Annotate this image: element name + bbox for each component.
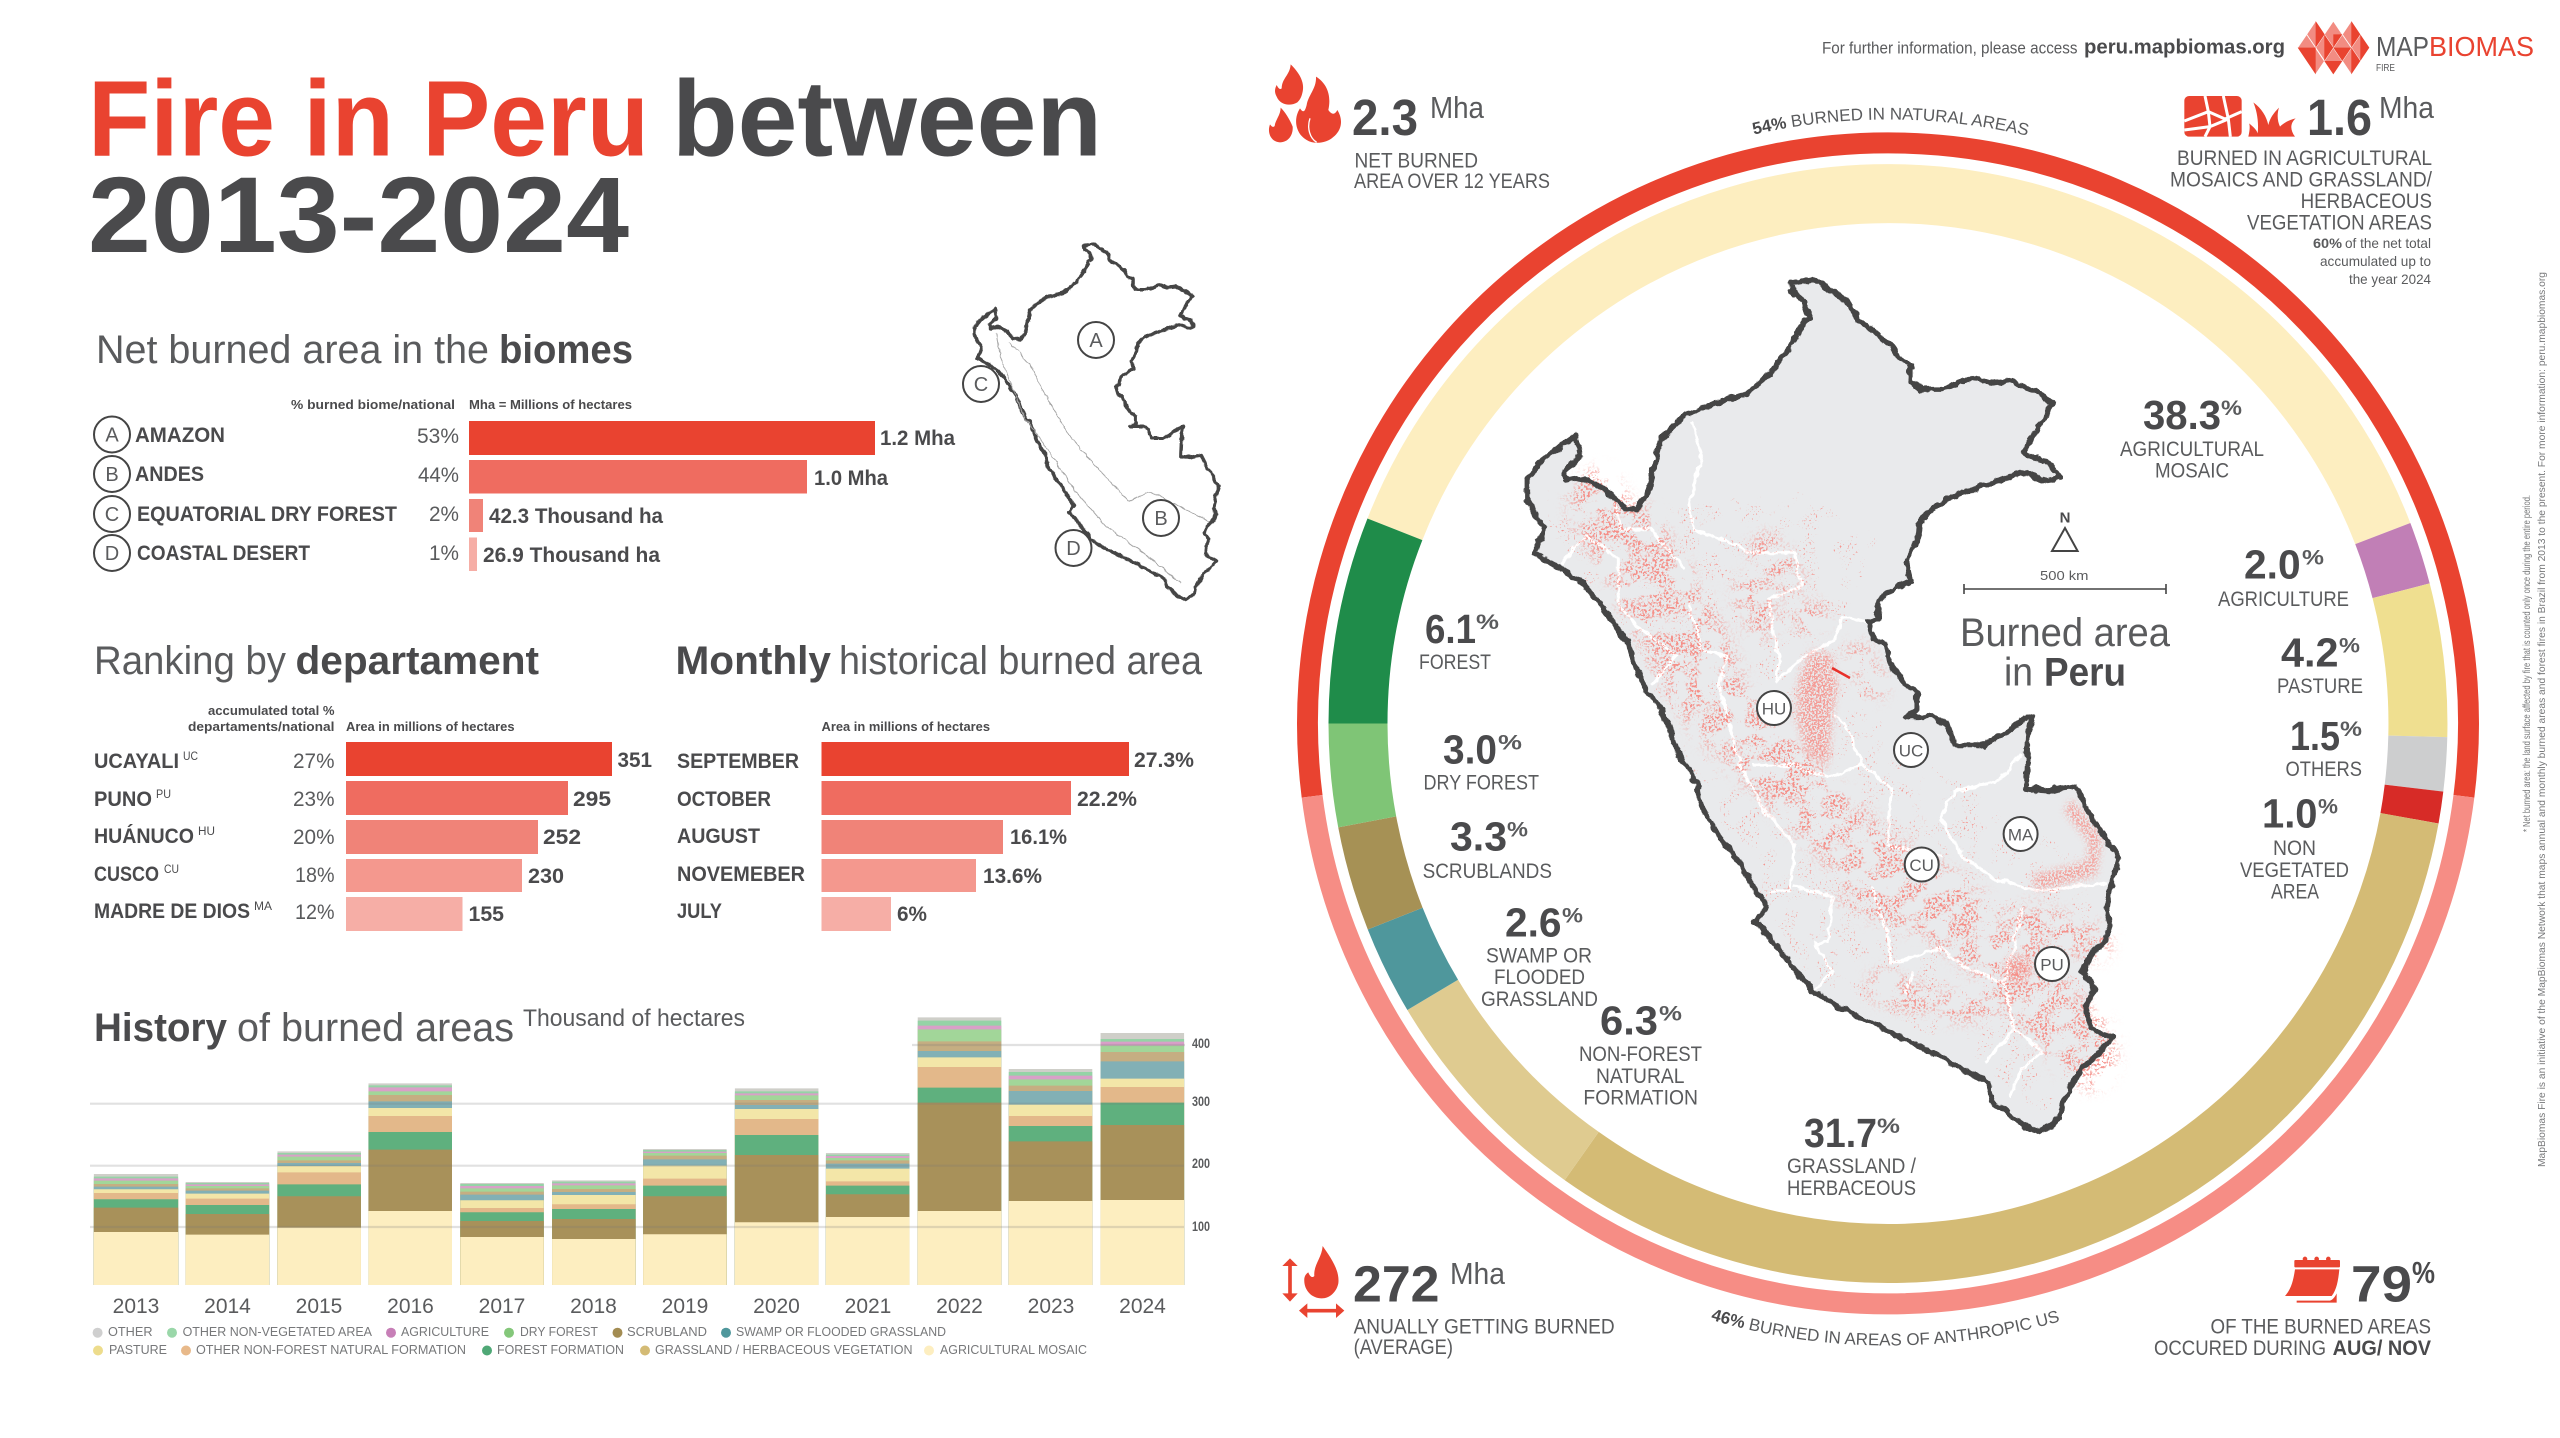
biome row: Amazon: AMAZON: [135, 424, 225, 447]
panel: biomes: [94, 328, 955, 571]
stat: burned in Aug-Nov: 79: [2351, 1256, 2412, 1312]
marker: Ucayali: UC: [1899, 742, 1923, 760]
biome row: Coastal desert: [94, 535, 660, 571]
biome row: Amazon: [94, 416, 955, 455]
heading: monthly: Monthly: [676, 639, 832, 683]
biome marker C: [963, 366, 999, 402]
donut label: grassland: HERBACEOUS: [1787, 1177, 1916, 1200]
row: September: SEPTEMBER: [677, 750, 799, 773]
legend: PASTURE: [109, 1342, 167, 1357]
donut label: agricultural mosaic: 38.3: [2143, 392, 2221, 438]
stat: burned in Aug-Nov: [2154, 1255, 2435, 1360]
map: burned area in Peru: [1527, 280, 2119, 1132]
biome row: Coastal desert: COASTAL DESERT: [137, 542, 310, 565]
row: Huanuco: [94, 820, 581, 854]
donut label: swamp: [1481, 900, 1598, 1011]
marker: Puno: PU: [2040, 956, 2064, 974]
row: July: 6%: [897, 903, 927, 926]
legend: OTHER NON-VEGETATED AREA: [183, 1324, 372, 1339]
burned area: dense core: [1797, 650, 2096, 983]
heading: history: [94, 1005, 745, 1050]
donut label: non vegetated: AREA: [2271, 881, 2319, 904]
icon: flames: [1269, 64, 1341, 143]
biome row: Equatorial dry forest: [94, 496, 663, 532]
map title: in: [2004, 650, 2033, 694]
stat: burned in Aug-Nov: OCCURED DURING: [2154, 1337, 2326, 1360]
donut chart: land cover: [1358, 194, 2418, 1254]
stat: burned in Aug-Nov: OF THE BURNED AREAS: [2210, 1316, 2431, 1339]
stat: burned in agricultural mosaics: the year 2024: [2349, 271, 2431, 287]
year labels: 2015: [296, 1295, 342, 1318]
donut label: swamp: 2.6: [1505, 900, 1562, 946]
stat: burned in agricultural mosaics: of the net total: [2345, 235, 2431, 251]
ranking column headers: [188, 704, 515, 734]
north arrow and scale: [1964, 510, 2166, 594]
marker: Cusco: CU: [1909, 856, 1934, 875]
row: Madre de Dios: MADRE DE DIOS: [94, 900, 250, 923]
biome marker C: C: [974, 374, 988, 396]
donut label: non-forest natural formation: NON-FOREST: [1579, 1043, 1702, 1066]
row: Cusco: CU: [164, 864, 179, 876]
donut label: swamp: FLOODED: [1494, 966, 1585, 989]
year labels: 2014: [204, 1295, 251, 1318]
row: September: 27.3%: [1134, 749, 1194, 772]
logo: MapBiomas Fire: MAP: [2376, 31, 2429, 62]
donut label: pasture: 4.2: [2281, 630, 2338, 676]
heading: monthly: [676, 639, 1203, 683]
year labels: 2022: [936, 1295, 983, 1318]
row: November: NOVEMEBER: [677, 863, 805, 886]
title: Fire in Peru: [88, 58, 649, 178]
map title: Peru: [2044, 650, 2126, 694]
donut label: forest: [1419, 606, 1499, 674]
north arrow and scale: 500 km: [2040, 568, 2088, 583]
donut label: dry forest: DRY FOREST: [1424, 772, 1539, 795]
stat: burned in agricultural mosaics: HERBACEOUS: [2301, 190, 2432, 213]
heading: ranking: departament: [296, 639, 539, 683]
biome row: Andes: B: [105, 464, 119, 486]
biome column headers: % burned biome/national: [291, 398, 455, 412]
heading: ranking: [94, 639, 539, 683]
donut label: grassland: [1787, 1110, 1916, 1200]
row: Puno: [94, 781, 611, 815]
row: August: [677, 820, 1067, 854]
biome marker B: B: [1154, 508, 1168, 530]
row: Madre de Dios: 155: [468, 903, 504, 926]
row: October: [677, 781, 1137, 815]
stat: annual burned area: [1282, 1246, 1615, 1359]
donut label: dry forest: [1424, 726, 1539, 795]
year labels: 2018: [570, 1295, 617, 1318]
side note: MapBiomas Fire is an initiative of the MapBiomas Network that maps annual and monthly burned areas and forest fires in Brazil from 2013 to the present. For more information: peru.mapbiomas.org: [2537, 272, 2548, 1167]
biome marker B: [1143, 500, 1179, 536]
donut label: scrublands: [1423, 814, 1552, 883]
heading: history: of burned areas: [237, 1006, 514, 1050]
Peru outline: [1527, 280, 2119, 1132]
row: Huanuco: HUÁNUCO: [94, 825, 194, 848]
heading: history: Thousand of hectares: [523, 1005, 745, 1032]
stat: burned in agricultural mosaics: 60%: [2313, 235, 2343, 251]
legend: AGRICULTURE: [401, 1324, 489, 1339]
donut label: scrublands: 3.3: [1450, 814, 1507, 860]
marker: Cusco: [1905, 848, 1939, 882]
row: July: [677, 897, 927, 931]
row: Madre de Dios: [94, 897, 504, 931]
legend: OTHER NON-FOREST NATURAL FORMATION: [196, 1342, 466, 1357]
legend: DRY FOREST: [520, 1324, 598, 1339]
monthly column header: Area in millions of hectares: [822, 720, 990, 734]
title: 2013-2024: [88, 154, 629, 275]
stat: net burned area: 2.3: [1352, 89, 1418, 146]
biome marker A: A: [1089, 330, 1103, 352]
title: between: [672, 58, 1102, 178]
biome row: Coastal desert: 1%: [429, 542, 459, 565]
biome row: Amazon: A: [105, 424, 119, 446]
axis values: 200: [1192, 1156, 1210, 1171]
donut label: non-forest natural formation: 6.3: [1600, 998, 1658, 1044]
side note: * Net burned area: the land surface affected by fire that is counted only once during the entire period.: [2522, 495, 2533, 832]
heading: monthly: historical burned area: [839, 639, 1203, 683]
row: Ucayali: 351: [618, 749, 652, 772]
stat: annual burned area: (AVERAGE): [1354, 1336, 1453, 1359]
donut label: agriculture: 2.0: [2244, 542, 2301, 588]
row: November: [677, 859, 1042, 892]
marker: Huanuco: HU: [1762, 700, 1786, 718]
stat: burned in agricultural mosaics: BURNED IN AGRICULTURAL: [2177, 147, 2432, 170]
biome marker D: D: [1066, 538, 1081, 560]
donut label: agricultural mosaic: AGRICULTURAL: [2120, 438, 2264, 461]
legend: SCRUBLAND: [627, 1324, 707, 1339]
legend: [93, 1324, 1087, 1357]
row: July: JULY: [677, 900, 722, 923]
donut label: non vegetated: [2240, 791, 2349, 904]
row: Huanuco: 20%: [293, 826, 334, 849]
row: Huanuco: 252: [543, 826, 581, 849]
map title: Burned area: [1960, 611, 2171, 655]
donut label: grassland: GRASSLAND /: [1787, 1155, 1916, 1178]
biome column headers: Mha = Millions of hectares: [469, 398, 632, 412]
donut label: grassland: 31.7: [1804, 1110, 1877, 1156]
header: further information: [1822, 37, 2285, 59]
donut label: scrublands: SCRUBLANDS: [1423, 860, 1552, 883]
heading: history: History: [94, 1006, 228, 1050]
marker: Huanuco: [1757, 691, 1791, 725]
donut label: non-forest natural formation: NATURAL: [1596, 1065, 1684, 1088]
row: Puno: 23%: [293, 788, 334, 811]
row: Ucayali: UCAYALI: [94, 750, 179, 773]
row: Madre de Dios: MA: [254, 901, 272, 913]
donut label: forest: FOREST: [1419, 651, 1491, 674]
legend: SWAMP OR FLOODED GRASSLAND: [736, 1324, 946, 1339]
biome marker D: [1056, 530, 1092, 566]
heading: ranking: Ranking by: [94, 639, 286, 683]
axis values: [1192, 1036, 1210, 1234]
donut label: dry forest: 3.0: [1443, 726, 1497, 772]
stat: burned in agricultural mosaics: accumulated up to: [2320, 253, 2431, 269]
row: Cusco: [94, 859, 564, 892]
stacked bar chart: [90, 1017, 1185, 1285]
donut label: forest: 6.1: [1425, 606, 1476, 652]
row: Puno: PU: [156, 789, 171, 801]
year labels: 2020: [753, 1295, 800, 1318]
row: August: 16.1%: [1010, 826, 1067, 849]
stat: net burned area: AREA OVER 12 YEARS: [1354, 170, 1550, 193]
donut label: dry forest: %: [1498, 732, 1522, 754]
donut label: agricultural mosaic: MOSAIC: [2155, 460, 2229, 482]
stat: burned in agricultural mosaics: VEGETATION AREAS: [2247, 212, 2432, 235]
heading: biomes: biomes: [499, 328, 633, 372]
marker: Puno: [2035, 947, 2069, 981]
logo: MapBiomas Fire: [2298, 21, 2534, 74]
row: Ucayali: [94, 742, 652, 776]
map: biomes of Peru: [963, 244, 1219, 600]
biome row: Coastal desert: D: [105, 543, 119, 565]
legend: OTHER: [108, 1324, 152, 1339]
donut label: others: [2286, 713, 2362, 781]
biome row: Andes: ANDES: [135, 463, 204, 486]
stat: net burned area: Mha: [1430, 90, 1485, 125]
row: Cusco: CUSCO: [94, 863, 159, 886]
donut label: agriculture: %: [2302, 546, 2324, 570]
curved label: natural areas: 54% BURNED IN NATURAL AREAS: [1752, 108, 2028, 135]
donut label: non-forest natural formation: FORMATION: [1583, 1087, 1698, 1110]
donut label: others: 1.5: [2290, 713, 2340, 759]
icon: flame with arrows: [1282, 1246, 1344, 1318]
row: August: AUGUST: [677, 825, 760, 848]
curved label: anthropic areas: 46% BURNED IN AREAS OF ANTHROPIC US: [1711, 1310, 2059, 1346]
row: November: 13.6%: [983, 865, 1042, 888]
biome row: Equatorial dry forest: 42.3 Thousand ha: [489, 505, 663, 528]
burned area: main bands: [1597, 507, 2098, 1052]
row: October: OCTOBER: [677, 788, 771, 811]
marker: Ucayali: [1894, 733, 1928, 767]
year labels: 2019: [662, 1295, 708, 1318]
stat: annual burned area: Mha: [1450, 1256, 1506, 1291]
donut label: pasture: PASTURE: [2277, 675, 2363, 698]
burned area: scattered low density: [1546, 490, 2098, 1115]
marker: Madre de Dios: [2004, 817, 2038, 851]
biome row: Equatorial dry forest: 2%: [429, 503, 459, 526]
north arrow and scale: N: [2060, 510, 2070, 526]
donut label: non vegetated: VEGETATED: [2240, 859, 2349, 882]
donut label: forest: %: [1476, 611, 1499, 634]
biome row: Andes: [94, 456, 888, 494]
donut label: scrublands: %: [1507, 818, 1528, 842]
row: October: 22.2%: [1077, 788, 1137, 811]
logo: MapBiomas Fire: FIRE: [2376, 63, 2395, 74]
year labels: [113, 1295, 1166, 1318]
row: Puno: PUNO: [94, 788, 152, 811]
row: Cusco: 230: [528, 865, 564, 888]
donut label: swamp: %: [1562, 905, 1583, 928]
stat: net burned area: [1269, 64, 1550, 193]
logo: MapBiomas Fire: BIOMAS: [2429, 31, 2534, 62]
row: Cusco: 18%: [295, 864, 334, 887]
row: Ucayali: 27%: [293, 750, 334, 773]
stat: annual burned area: 272: [1353, 1256, 1440, 1312]
donut label: swamp: GRASSLAND: [1481, 988, 1598, 1011]
stat: burned in agricultural mosaics: 1.6: [2307, 89, 2372, 146]
row: September: [677, 742, 1194, 776]
ranking column headers: accumulated total %: [208, 704, 334, 718]
donut label: pasture: [2277, 630, 2363, 698]
row: Huanuco: HU: [198, 826, 215, 838]
heading: biomes: Net burned area in the: [96, 328, 489, 372]
biome marker A: [1078, 322, 1114, 358]
biome row: Amazon: 1.2 Mha: [880, 427, 955, 450]
biome row: Coastal desert: 26.9 Thousand ha: [483, 544, 660, 567]
row: Ucayali: UC: [183, 751, 198, 763]
stat: burned in agricultural mosaics: [2170, 89, 2435, 287]
icon: calendar: [2285, 1257, 2340, 1303]
biome row: Amazon: 53%: [417, 425, 459, 448]
axis values: 400: [1192, 1036, 1210, 1051]
panel: ranking by department: [94, 639, 652, 931]
legend: FOREST FORMATION: [497, 1342, 624, 1357]
marker: Madre de Dios: MA: [2008, 826, 2034, 844]
row: Madre de Dios: 12%: [295, 901, 334, 924]
donut label: non-forest natural formation: %: [1659, 1003, 1682, 1026]
stat: burned in Aug-Nov: AUG/ NOV: [2333, 1337, 2431, 1360]
panel: monthly historical: [676, 639, 1203, 931]
header: further information: peru.mapbiomas.org: [2084, 37, 2285, 59]
donut label: others: OTHERS: [2286, 758, 2362, 781]
ranking column headers: Area in millions of hectares: [346, 720, 515, 734]
year labels: 2023: [1028, 1295, 1074, 1318]
year labels: 2013: [113, 1295, 159, 1318]
biome row: Andes: 44%: [418, 464, 459, 487]
stat: net burned area: NET BURNED: [1354, 150, 1478, 173]
legend: GRASSLAND / HERBACEOUS VEGETATION: [655, 1342, 912, 1357]
year labels: 2016: [387, 1295, 434, 1318]
biome row: Equatorial dry forest: EQUATORIAL DRY FOREST: [137, 503, 397, 526]
donut label: agriculture: [2218, 542, 2349, 611]
header: further information: For further information, please access: [1822, 39, 2078, 58]
year labels: 2021: [845, 1295, 891, 1318]
ranking column headers: departaments/national: [188, 720, 334, 734]
donut label: non-forest natural formation: [1579, 998, 1702, 1110]
panel: history of burned areas: [90, 1005, 1210, 1357]
donut label: agricultural mosaic: [2120, 392, 2264, 482]
donut label: non vegetated: NON: [2273, 837, 2316, 860]
donut label: pasture: %: [2339, 635, 2360, 658]
title: [88, 58, 1102, 275]
row: Puno: 295: [573, 788, 611, 811]
side note: [2522, 272, 2548, 1167]
donut label: swamp: SWAMP OR: [1486, 945, 1592, 968]
donut label: non vegetated: %: [2318, 796, 2338, 819]
legend: AGRICULTURAL MOSAIC: [940, 1342, 1087, 1357]
stat: annual burned area: ANUALLY GETTING BURNED: [1354, 1316, 1615, 1339]
donut label: agriculture: AGRICULTURE: [2218, 588, 2349, 611]
map title: [1960, 611, 2171, 694]
stat: burned in Aug-Nov: %: [2412, 1255, 2435, 1290]
biome row: Andes: 1.0 Mha: [814, 467, 888, 490]
icon: agricultural plots and grass: [2184, 96, 2296, 137]
year labels: 2024: [1119, 1295, 1166, 1318]
donut label: grassland: %: [1877, 1115, 1900, 1138]
biome row: Equatorial dry forest: C: [105, 504, 119, 526]
biome column headers: [291, 398, 632, 412]
stat: burned in agricultural mosaics: Mha: [2379, 90, 2435, 125]
axis values: 300: [1192, 1094, 1210, 1109]
axis values: 100: [1192, 1219, 1210, 1234]
year labels: 2017: [479, 1295, 525, 1318]
donut label: non vegetated: 1.0: [2262, 791, 2318, 837]
donut label: agricultural mosaic: %: [2221, 397, 2242, 420]
burned area: hot spot: [1832, 668, 1850, 678]
donut label: others: %: [2340, 718, 2362, 741]
stat: burned in agricultural mosaics: MOSAICS AND GRASSLAND/: [2170, 168, 2432, 191]
ring: natural vs anthropic: [1308, 143, 2468, 1304]
